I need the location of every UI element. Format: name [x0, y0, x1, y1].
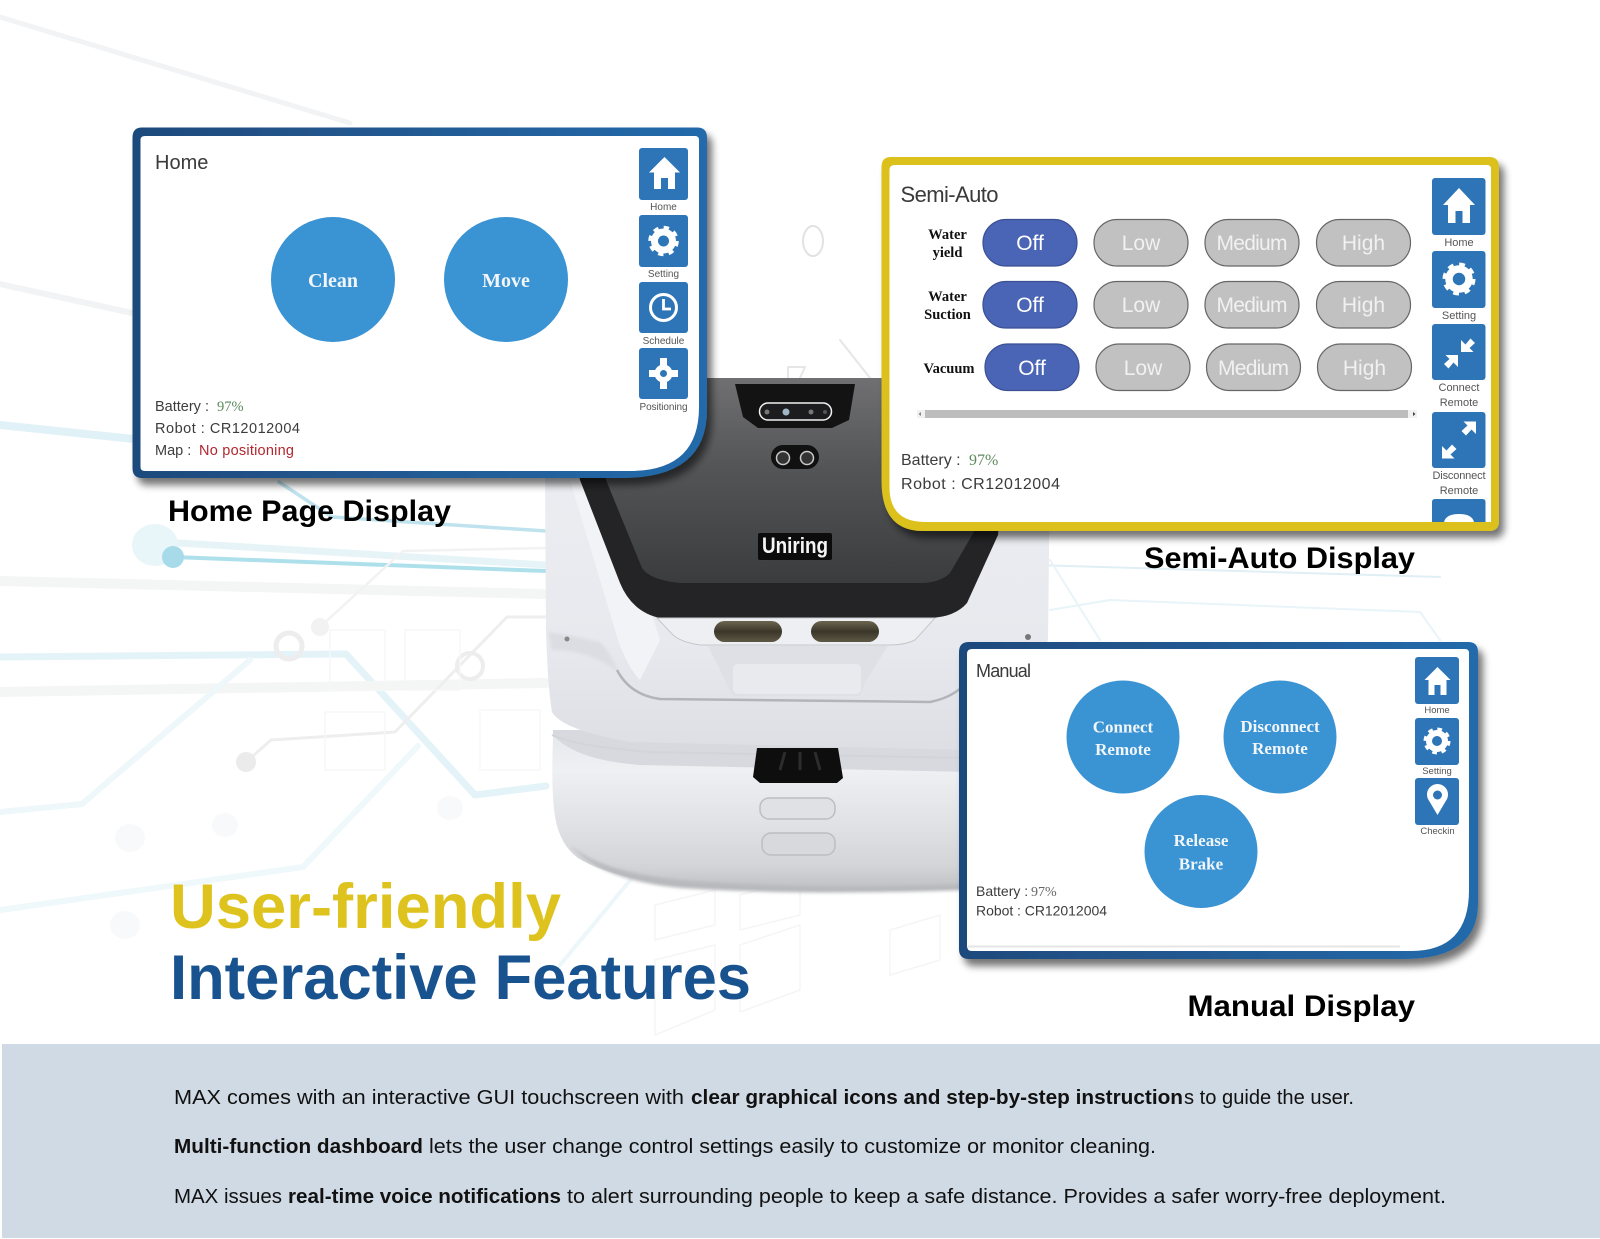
- caption: home page display: Home Page Display: [168, 495, 451, 528]
- icon: setting: Setting: [1422, 766, 1452, 777]
- status text: Robot : CR12012004: [155, 421, 300, 437]
- row: water suction: Low: [1122, 294, 1161, 317]
- status text: 97%: [217, 399, 244, 415]
- button: disconnect remote: Remote: [1252, 739, 1308, 758]
- icon: connect remote: Remote: [1440, 397, 1478, 409]
- robot lower base: [552, 730, 970, 890]
- robot camera: [735, 384, 855, 428]
- button: release brake: Release: [1174, 831, 1229, 850]
- button: clean: Clean: [308, 270, 358, 292]
- status text: Robot : CR12012004: [901, 476, 1060, 493]
- status text: Battery :: [901, 452, 961, 469]
- text: line three: [174, 1186, 1446, 1208]
- row: water yield: Off: [1016, 232, 1044, 255]
- icon: partial tile: [1432, 499, 1486, 522]
- caption: manual display: Manual Display: [1188, 990, 1415, 1023]
- icon: connect remote: Connect: [1439, 382, 1479, 394]
- status text: Battery :: [976, 883, 1028, 899]
- icon: setting: [1432, 251, 1486, 322]
- status text: Robot : CR12012004: [976, 902, 1107, 918]
- row: vacuum: Vacuum: [923, 361, 975, 377]
- button: disconnect remote: Disconnect: [1240, 717, 1320, 736]
- icon: disconnect remote: Disconnect: [1432, 470, 1486, 482]
- row: vacuum: High: [1343, 357, 1386, 380]
- text: line one: s to guide the user.: [1184, 1087, 1354, 1109]
- button: release brake: Brake: [1179, 854, 1224, 874]
- row: vacuum: Medium: [1218, 357, 1289, 380]
- row: water suction: Water: [928, 289, 967, 305]
- text: line one: clear graphical icons and step-by-step instruction: [691, 1087, 1183, 1109]
- row: vacuum: Off: [1018, 357, 1046, 380]
- status text: [976, 883, 1107, 918]
- icon: setting: Setting: [648, 269, 679, 280]
- panel: manual display: [959, 642, 1478, 959]
- button: connect remote: [1066, 680, 1180, 794]
- status text: [155, 399, 300, 459]
- title: Interactive Features: [170, 943, 751, 1013]
- status text: 97%: [1031, 885, 1057, 900]
- icon: home: [639, 148, 688, 213]
- icon: home: [1415, 657, 1459, 716]
- status text: 97%: [969, 452, 998, 469]
- text: line one: MAX comes with an interactive GUI touchscreen with: [174, 1087, 684, 1109]
- text: line three: MAX issues: [174, 1186, 282, 1208]
- heading: manual: Manual: [976, 661, 1031, 681]
- row: vacuum: Low: [1124, 357, 1163, 380]
- text: line three: real-time voice notifications: [288, 1186, 561, 1208]
- panel: semi-auto display: [882, 157, 1499, 531]
- text: line two: lets the user change control settings easily to customize or monitor cleaning.: [429, 1136, 1156, 1158]
- status text: Map :: [155, 443, 191, 459]
- status text: [901, 452, 1060, 493]
- row: vacuum: [923, 344, 1412, 390]
- button: move: Move: [482, 270, 530, 292]
- icon: positioning: [639, 348, 688, 413]
- heading: home: Home: [155, 152, 208, 174]
- robot lower plate with vents: [657, 618, 935, 645]
- row: water suction: High: [1342, 294, 1385, 317]
- text: line one: [174, 1087, 1354, 1109]
- robot sensor: [771, 445, 819, 469]
- icon: checkin: Checkin: [1420, 826, 1455, 837]
- robot bumper: [708, 646, 888, 696]
- icon: home: Home: [1424, 705, 1450, 716]
- row: water yield: Medium: [1216, 232, 1288, 255]
- row: water suction: Suction: [924, 307, 971, 323]
- background circuit pattern: [0, 17, 1440, 1035]
- icon: connect remote: [1432, 324, 1486, 409]
- row: water yield: yield: [933, 245, 962, 261]
- icon: disconnect remote: [1432, 412, 1486, 497]
- button: clean: [271, 217, 395, 342]
- icon: setting: [639, 215, 688, 280]
- robot dark panel: [560, 378, 1010, 618]
- row: water suction: Off: [1016, 294, 1044, 317]
- button: connect remote: Connect: [1093, 718, 1154, 736]
- button: connect remote: Remote: [1095, 740, 1151, 759]
- icon: home: Home: [650, 202, 677, 213]
- row: water yield: [928, 220, 1410, 266]
- panel: home page display: [132, 128, 707, 478]
- icon: home: [1432, 178, 1486, 249]
- status text: No positioning: [199, 443, 294, 459]
- status text: Battery :: [155, 399, 209, 415]
- robot logo: Uniring: [762, 533, 828, 558]
- title: User-friendly: [170, 872, 561, 942]
- icon: positioning: Positioning: [640, 402, 688, 413]
- row: water yield: Water: [928, 227, 967, 243]
- icon: checkin: [1415, 778, 1459, 837]
- icon: schedule: [639, 282, 688, 347]
- icon: disconnect remote: Remote: [1440, 485, 1478, 497]
- background circuit nodes: [110, 524, 463, 939]
- scrollbar: [917, 410, 1417, 418]
- robot upper shell: [545, 378, 1050, 755]
- robot base grooves: [760, 798, 835, 819]
- icon: home: Home: [1444, 237, 1474, 249]
- title: [170, 872, 751, 1013]
- row: water suction: [924, 282, 1410, 328]
- icon: setting: [1415, 718, 1459, 777]
- robot: [545, 378, 1050, 893]
- button: move: [444, 217, 568, 342]
- row: water yield: High: [1342, 232, 1385, 255]
- caption: semi-auto display: Semi-Auto Display: [1144, 542, 1415, 575]
- icon: setting: Setting: [1442, 310, 1476, 322]
- button: disconnect remote: [1224, 680, 1336, 794]
- panel: description band: [2, 1044, 1600, 1238]
- button: release brake: [1144, 795, 1258, 908]
- heading: semi-auto: Semi-Auto: [900, 182, 998, 207]
- text: line two: [174, 1136, 1156, 1158]
- row: water suction: Medium: [1216, 294, 1288, 317]
- text: line three: to alert surrounding people to keep a safe distance. Provides a safer worry-free deployment.: [567, 1186, 1446, 1208]
- robot lidar: [753, 748, 843, 783]
- icon: schedule: Schedule: [643, 336, 685, 347]
- text: line two: Multi-function dashboard: [174, 1136, 423, 1158]
- row: water yield: Low: [1122, 232, 1161, 255]
